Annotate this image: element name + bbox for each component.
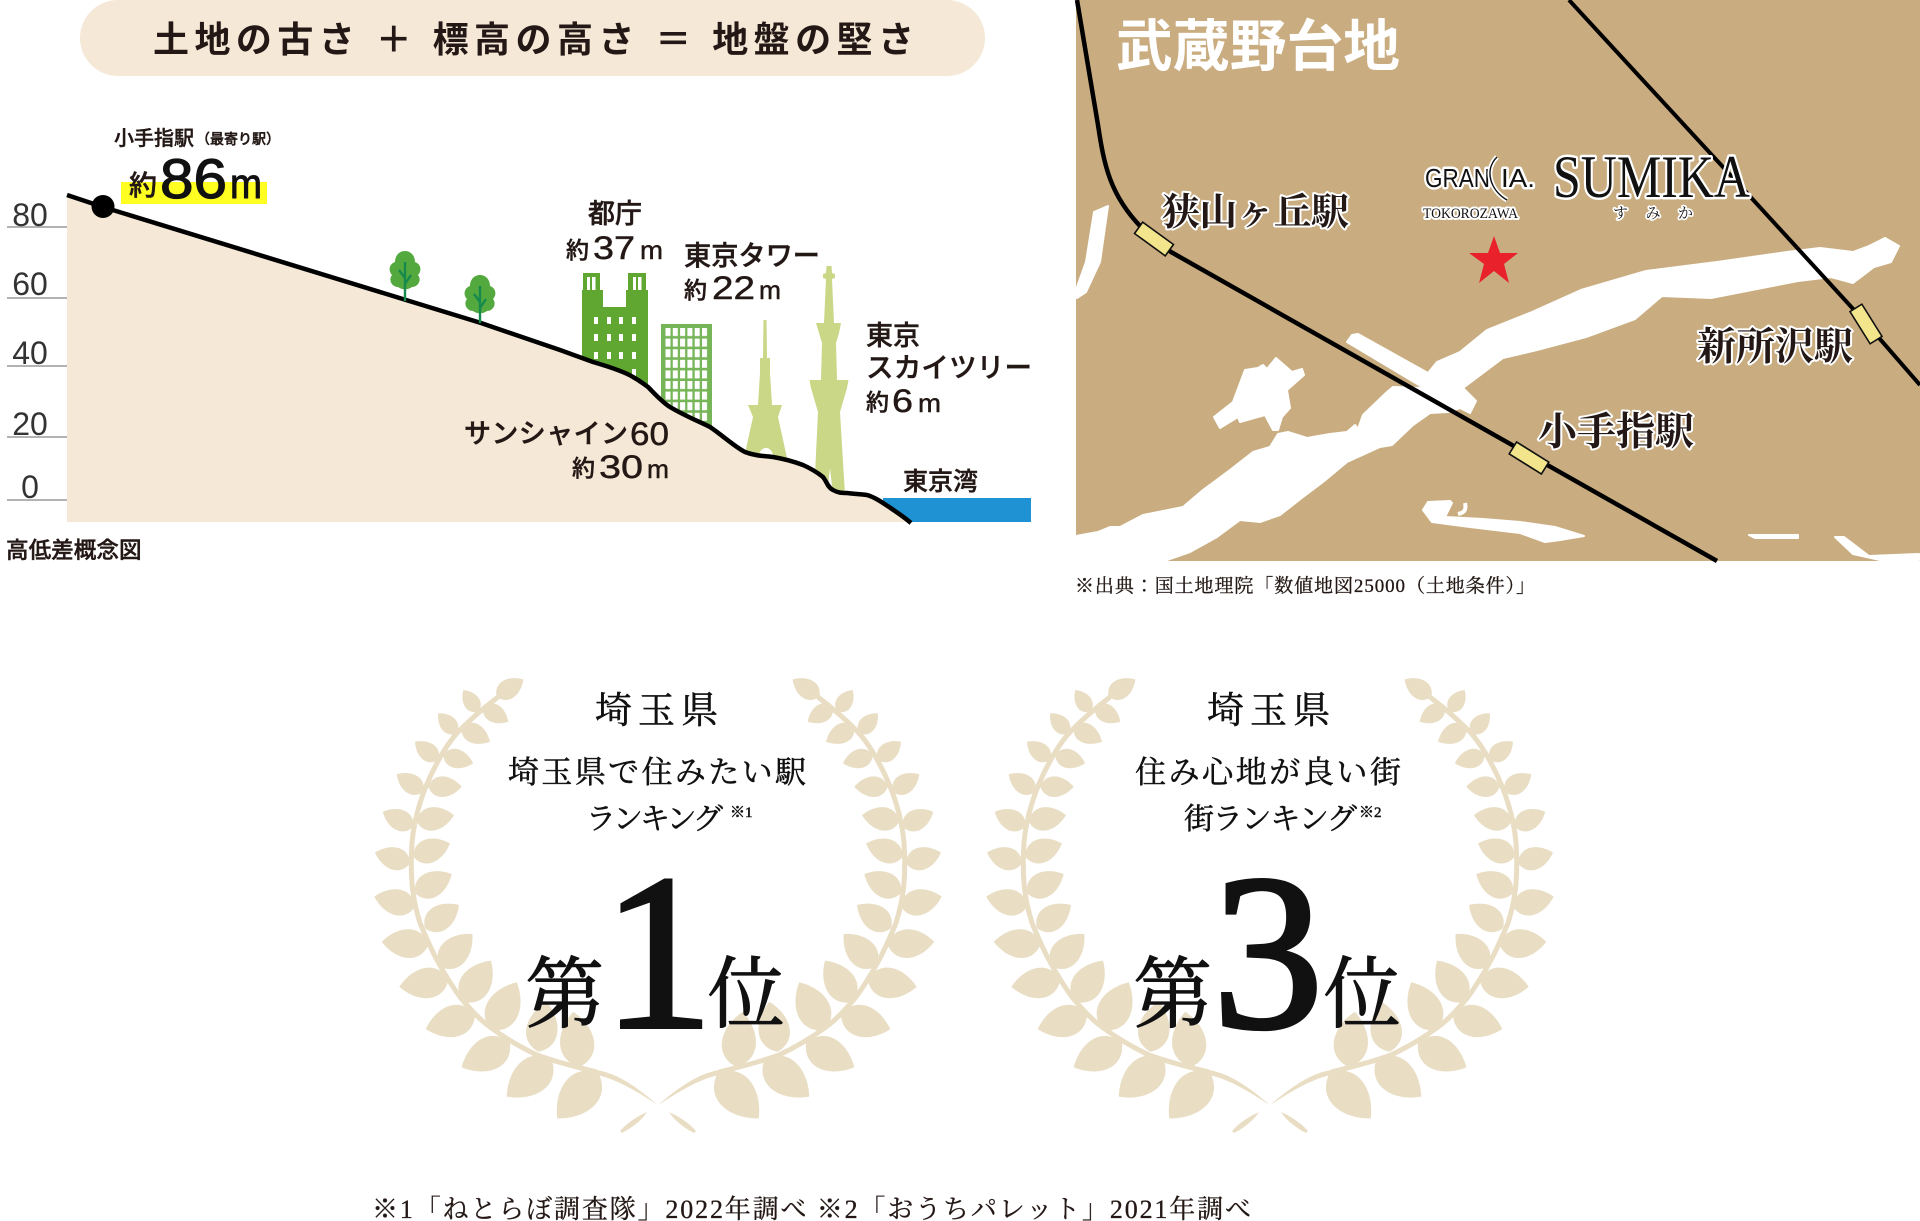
station marker dot — [92, 195, 114, 218]
label: tocho 37m: 都庁 — [588, 199, 642, 229]
y axis scale: 0 — [21, 469, 39, 505]
badge text: 街ランキング — [1184, 803, 1357, 836]
property logo: GRAN — [1425, 163, 1490, 193]
label: kotesashi station 86m: m — [230, 160, 262, 207]
laurel wreath — [371, 671, 945, 1133]
label: skytree 6m — [866, 321, 1032, 419]
label: skytree 6m: 6 — [892, 383, 913, 419]
badge text: ※2 — [1359, 805, 1382, 821]
panel: musashino plateau map — [1076, 0, 1920, 561]
y axis scale — [7, 197, 67, 505]
label: skytree 6m: m — [918, 388, 941, 418]
property logo: SUMIKA — [1553, 144, 1750, 210]
tree left — [390, 251, 420, 301]
icon: red star — [1469, 236, 1518, 283]
label: tocho 37m — [566, 199, 663, 266]
label: tokyo tower 22m: 東京タワー — [684, 240, 820, 271]
label: tokyo bay: 東京湾 — [903, 468, 978, 496]
station labels — [1162, 192, 1853, 454]
label: sunshine 60 30m: 30 — [599, 449, 643, 485]
y axis scale: 80 — [12, 197, 48, 233]
property logo: すみか — [1613, 206, 1693, 222]
label: sunshine 60 30m: 約 — [572, 455, 595, 481]
chart caption: 高低差概念図 — [6, 538, 142, 563]
bay water — [883, 498, 1031, 522]
property logo — [1423, 144, 1750, 222]
tree right — [465, 275, 495, 323]
badge text: 3 — [1212, 830, 1324, 1076]
label: kotesashi station 86m: 小手指駅 — [114, 128, 194, 150]
badge text: 埼玉県で住みたい駅 — [508, 755, 806, 790]
tokyo metropolitan government building — [582, 273, 648, 390]
label: skytree 6m: 東京 — [866, 321, 920, 351]
elevation cross-section chart — [7, 127, 1032, 523]
y axis scale: 60 — [12, 266, 48, 302]
y axis scale: 40 — [12, 335, 48, 371]
railway lines — [1077, 0, 1920, 561]
badge text: 第 — [1134, 951, 1212, 1038]
label: tokyo tower 22m: m — [759, 275, 781, 305]
y axis scale: 20 — [12, 406, 48, 442]
tokyo skytree — [810, 266, 848, 495]
white lowland shapes — [1076, 206, 1919, 560]
badge text — [508, 690, 806, 1076]
station labels: 小手指駅 — [1538, 411, 1694, 454]
map source note: ※出典：国土地理院「数値地図25000（土地条件）」 — [1075, 575, 1535, 597]
wreath badge: rank 3 — [983, 671, 1557, 1133]
label: sunshine 60 30m — [464, 416, 669, 485]
tokyo tower — [744, 320, 787, 464]
badge text: 第 — [526, 951, 604, 1038]
terrain outline — [67, 195, 911, 523]
badge text: 1 — [602, 830, 714, 1076]
badge text: 位 — [707, 951, 785, 1038]
station labels: 新所沢駅 — [1697, 326, 1853, 369]
label: skytree 6m: 約 — [866, 389, 889, 415]
laurel wreath — [983, 671, 1557, 1133]
label: tokyo tower 22m — [684, 240, 820, 306]
label: sunshine 60 30m: サンシャイン — [464, 419, 628, 449]
badge text: 住み心地が良い街 — [1135, 755, 1401, 790]
map background — [1076, 0, 1920, 561]
badge text: 埼玉県 — [595, 690, 718, 732]
label: kotesashi station 86m: 約 — [129, 170, 157, 201]
label: tokyo tower 22m: 22 — [712, 270, 755, 306]
badge text — [1134, 690, 1401, 1076]
property logo: IA. — [1501, 163, 1535, 193]
badge text: 埼玉県 — [1207, 690, 1330, 732]
label: sunshine 60 30m: 60 — [630, 416, 669, 452]
sunshine 60 building — [661, 324, 712, 434]
label: sunshine 60 30m: m — [647, 454, 669, 484]
badge text: ランキング — [586, 803, 723, 836]
label: skytree 6m: スカイツリー — [866, 352, 1032, 383]
label: tokyo tower 22m: 約 — [684, 277, 707, 303]
heading pill: ground strength formula — [80, 0, 985, 76]
badge text: ※1 — [730, 805, 753, 821]
terrain — [67, 195, 911, 522]
label: tocho 37m: 37 — [593, 230, 635, 266]
label: tocho 37m: m — [640, 235, 663, 265]
heading pill: ground strength formula: 土地の古さ ＋ 標高の高さ ＝ 地盤の堅さ — [153, 19, 914, 60]
station labels: 狭山ヶ丘駅 — [1162, 192, 1349, 234]
label: kotesashi station 86m: （最寄り駅） — [196, 131, 280, 147]
label: kotesashi station 86m: 86 — [160, 147, 227, 210]
station markers — [1135, 222, 1882, 474]
wreath badge: rank 1 — [371, 671, 945, 1133]
badge text: 位 — [1323, 951, 1401, 1038]
property logo: TOKOROZAWA — [1423, 206, 1518, 222]
label: tocho 37m: 約 — [566, 237, 589, 263]
map title: 武蔵野台地 — [1116, 15, 1400, 78]
label: kotesashi station 86m — [114, 127, 280, 210]
